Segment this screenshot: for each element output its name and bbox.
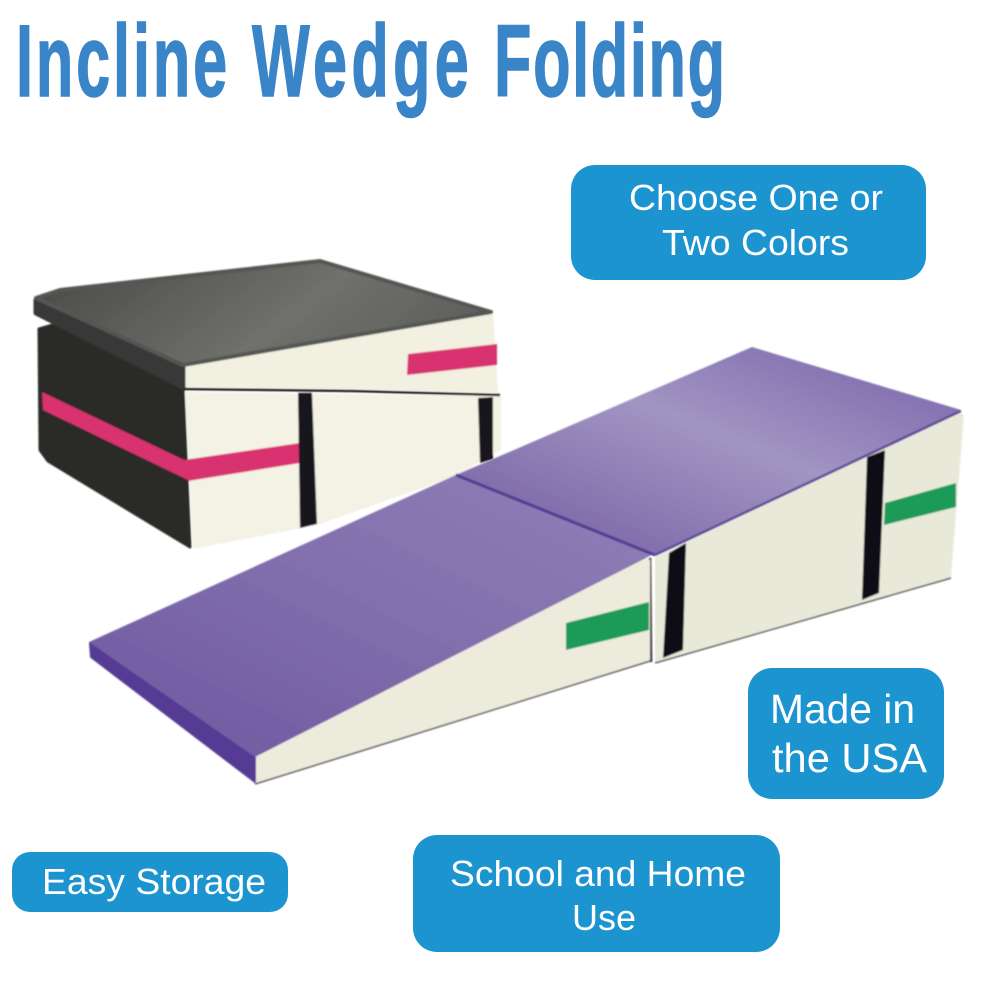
callout: made in the USA: [748, 668, 944, 799]
callout: school and home use: School and Home: [450, 853, 746, 894]
lower body dark end: [39, 325, 190, 547]
rear wedge bottom shadow: [655, 578, 951, 663]
callout: choose colors: [571, 165, 926, 280]
rear strap 2: [862, 450, 885, 600]
callout: school and home use: Use: [572, 897, 636, 938]
callout: easy storage: Easy Storage: [42, 861, 266, 902]
black strap left: [298, 393, 317, 528]
callout: easy storage: [12, 852, 288, 912]
seam: [456, 475, 655, 555]
lid top surface: [36, 261, 491, 365]
callout: choose colors: Choose One or: [629, 177, 883, 218]
pink stripe on dark end: [42, 392, 188, 480]
callout: made in the USA: the USA: [772, 735, 928, 781]
lower cream side: [185, 392, 501, 549]
wedge gap: [650, 558, 651, 662]
callout: choose colors: Two Colors: [662, 222, 849, 263]
black strap right: [478, 397, 493, 463]
lid cream side: [183, 312, 498, 393]
front wedge bottom shadow: [255, 661, 650, 784]
rear wedge cream side: [655, 412, 964, 662]
front wedge cream side: [255, 558, 650, 783]
lid front lip: [36, 300, 183, 387]
lid seam line: [183, 389, 500, 395]
rear strap 1: [663, 543, 686, 658]
green stripe rear: [884, 483, 956, 525]
pink stripe on cream side: [184, 443, 300, 481]
title: Wedge: [252, 4, 473, 118]
title: [16, 4, 727, 118]
photo: unfolded purple incline wedge: [89, 347, 964, 784]
rear slope top edge shade: [655, 411, 961, 555]
title: Folding: [494, 4, 727, 118]
front lip: [90, 643, 255, 782]
callout: made in the USA: Made in: [770, 686, 915, 732]
front slope: [89, 475, 655, 757]
rear slope: [456, 347, 961, 555]
callout: school and home use: [413, 835, 780, 952]
green stripe front: [566, 602, 649, 650]
title: Incline: [16, 4, 230, 118]
photo: folded wedge mat stacked as a box: [36, 261, 501, 549]
lid pink stripe: [407, 344, 497, 375]
